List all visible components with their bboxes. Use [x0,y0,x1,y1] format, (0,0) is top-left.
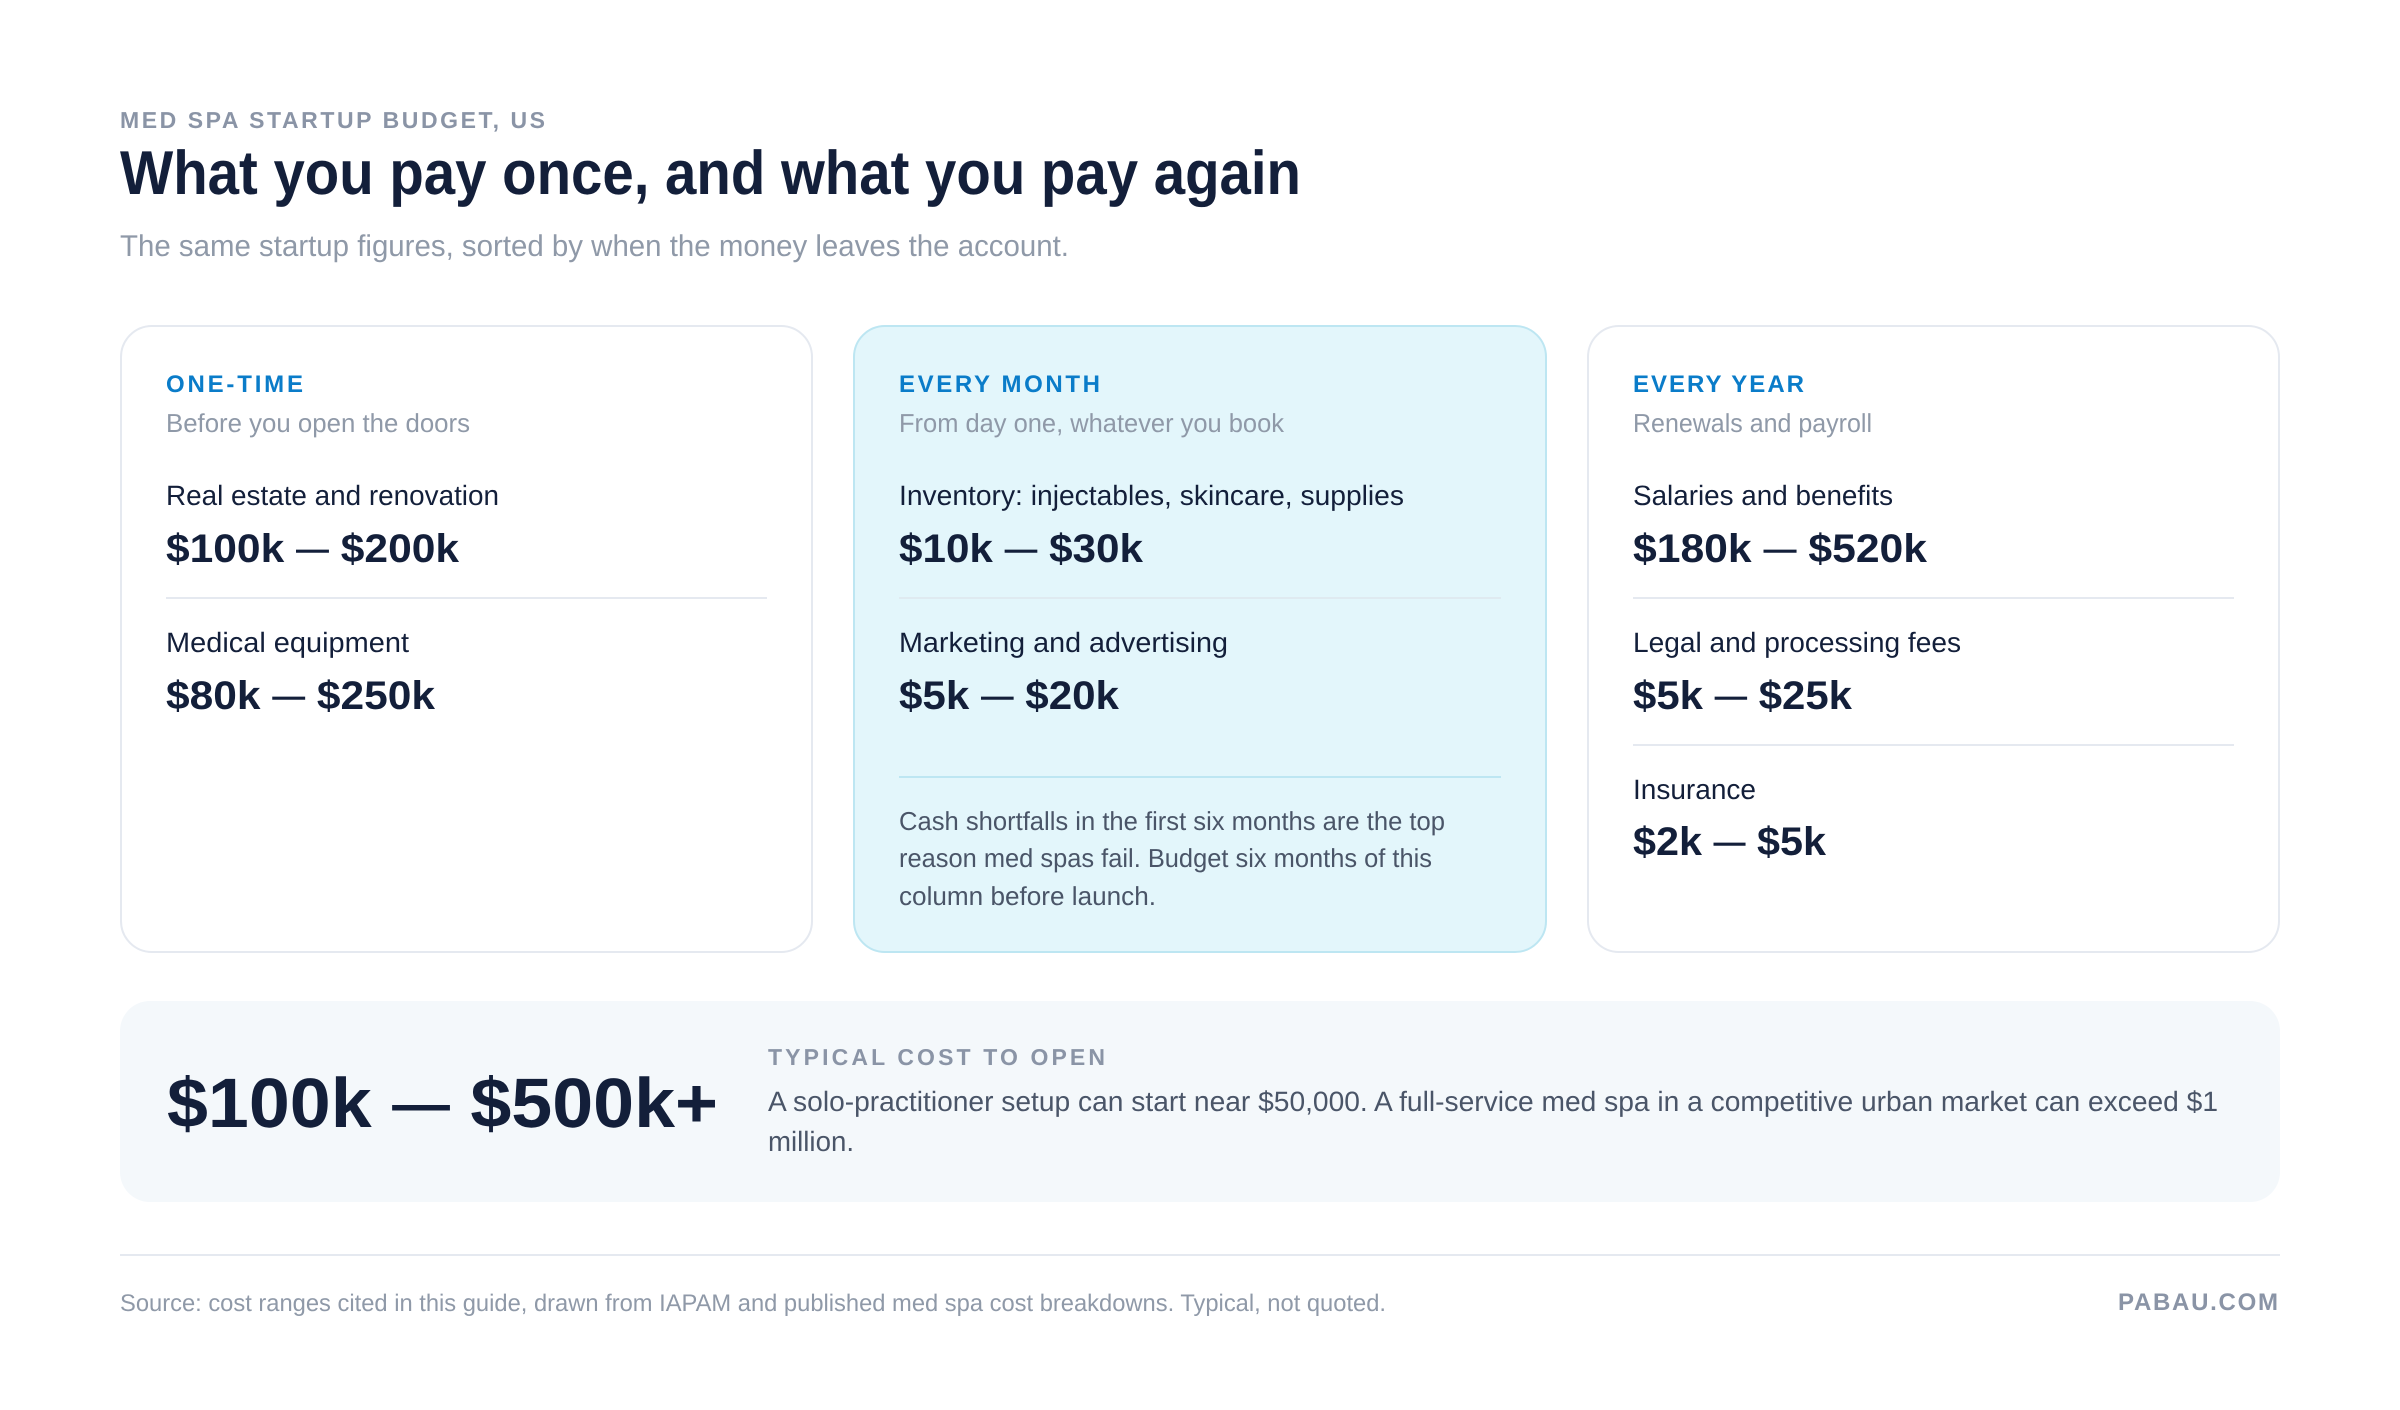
panel: every month [854,326,1546,952]
item: insurance: Insurance [1633,774,1756,805]
item: legal: — [1715,678,1747,714]
header [120,107,1301,263]
item: insurance: — [1713,824,1746,860]
panel: typical cost band [120,1001,2280,1202]
callout note [899,806,1445,911]
item: real estate: $100k [166,527,277,571]
big range figure: — [392,1072,450,1134]
source note: Source: cost ranges cited in this guide, drawn from IAPAM and published med spa cost breakdowns. Typical, not quoted. [120,1290,1386,1317]
title: What you pay once, and what you pay again [120,139,1301,208]
item: medical equipment: $80k [166,674,255,718]
panel: every year [1588,326,2279,952]
band description [768,1086,2218,1157]
item: real estate [166,480,499,571]
callout note: Cash shortfalls in the first six months are the top [899,806,1445,836]
big range figure: $500k+ [450,1064,718,1142]
heading: every month: EVERY MONTH [899,371,1100,398]
item: legal: $5k [1633,674,1700,718]
item: inventory [899,480,1404,571]
band description: million. [768,1126,854,1157]
item: marketing: Marketing and advertising [899,627,1228,658]
panel: one-time [121,326,812,952]
item: salaries [1633,480,1928,571]
item: marketing: — [981,678,1014,714]
subheading: Before you open the doors [166,408,470,438]
band label: TYPICAL COST TO OPEN [768,1044,1105,1070]
item: real estate: — [296,532,329,566]
callout note: column before launch. [899,881,1156,911]
item: inventory: $30k [1037,527,1144,571]
item: medical equipment [166,627,436,718]
subtitle: The same startup figures, sorted by when the money leaves the account. [120,230,1069,263]
item: legal: $25k [1747,674,1853,718]
item: inventory: — [1005,532,1037,566]
item: marketing: $20k [1014,674,1120,718]
big range figure: $100k [167,1064,362,1142]
item: real estate: $200k [329,527,460,571]
item: marketing [899,627,1228,718]
subheading: From day one, whatever you book [899,408,1285,438]
item: medical equipment: $250k [305,674,436,718]
item: salaries: — [1763,532,1797,566]
item: inventory: Inventory: injectables, skincare, supplies [899,480,1404,511]
subheading: Renewals and payroll [1633,408,1872,438]
item: salaries: $180k [1633,527,1744,571]
item: medical equipment: — [272,678,305,714]
item: medical equipment: Medical equipment [166,627,409,658]
item: marketing: $5k [899,674,966,718]
eyebrow: MED SPA STARTUP BUDGET, US [120,107,545,133]
heading: one-time: ONE-TIME [166,371,303,398]
item: insurance [1633,774,1827,864]
item: insurance: $5k [1746,820,1827,864]
item: legal [1633,627,1961,718]
callout note: reason med spas fail. Budget six months of this [899,843,1432,873]
item: salaries: $520k [1797,527,1928,571]
item: legal: Legal and processing fees [1633,627,1961,658]
item: salaries: Salaries and benefits [1633,480,1893,511]
heading: every year: EVERY YEAR [1633,371,1804,398]
item: inventory: $10k [899,527,988,571]
item: insurance: $2k [1633,820,1700,864]
item: real estate: Real estate and renovation [166,480,499,511]
brand: PABAU.COM [2118,1289,2278,1316]
band description: A solo-practitioner setup can start near $50,000. A full-service med spa in a competitive urban market can exceed $1 [768,1086,2218,1117]
